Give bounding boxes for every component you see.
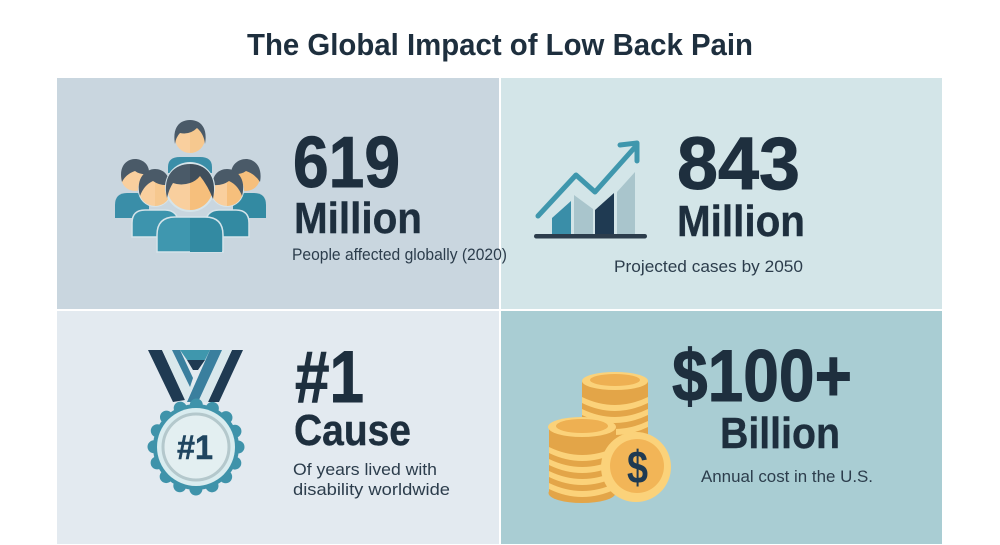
middle left person [132, 169, 179, 237]
top person [168, 120, 212, 173]
bars [552, 172, 635, 234]
caption: disability worldwide [293, 480, 450, 499]
center person [157, 162, 223, 252]
medal number: #1 [177, 429, 213, 467]
middle right person [205, 169, 249, 237]
title: The Global Impact of Low Back Pain [247, 27, 753, 62]
arrow [538, 143, 637, 216]
icon: medal [148, 350, 243, 490]
caption: People affected globally (2020) [292, 245, 507, 264]
stat label: Million: Million [294, 194, 422, 243]
far left person [115, 159, 149, 218]
large dollar coin: $ [627, 441, 648, 493]
stat: #1: #1 [295, 337, 364, 418]
caption: Annual cost in the U.S. [701, 467, 873, 486]
panel: number one cause [57, 311, 499, 544]
front coin stack [548, 417, 616, 503]
icon: stacked coins [548, 372, 671, 503]
panel: 843 million projected cases [501, 78, 942, 309]
caption [293, 460, 450, 499]
back coin stack [582, 372, 648, 446]
stat label: Million: Million [677, 197, 805, 246]
stat label: Cause: Cause [294, 406, 411, 455]
stat: $100+: $100+ [672, 336, 852, 417]
icon: group of people [115, 120, 266, 252]
ribbon [148, 350, 243, 402]
caption: Of years lived with [293, 460, 437, 479]
panel: 100 billion annual cost [501, 311, 942, 544]
stat: 619: 619 [293, 123, 400, 203]
far right person [231, 159, 266, 218]
icon: rising bar chart with arrow [534, 143, 647, 238]
caption: Projected cases by 2050 [614, 257, 803, 276]
baseline [534, 234, 647, 238]
medal disc [153, 404, 239, 490]
panel: 619 million people affected [57, 78, 507, 309]
stat: 843: 843 [677, 122, 800, 205]
stat label: Billion: Billion [720, 409, 840, 458]
